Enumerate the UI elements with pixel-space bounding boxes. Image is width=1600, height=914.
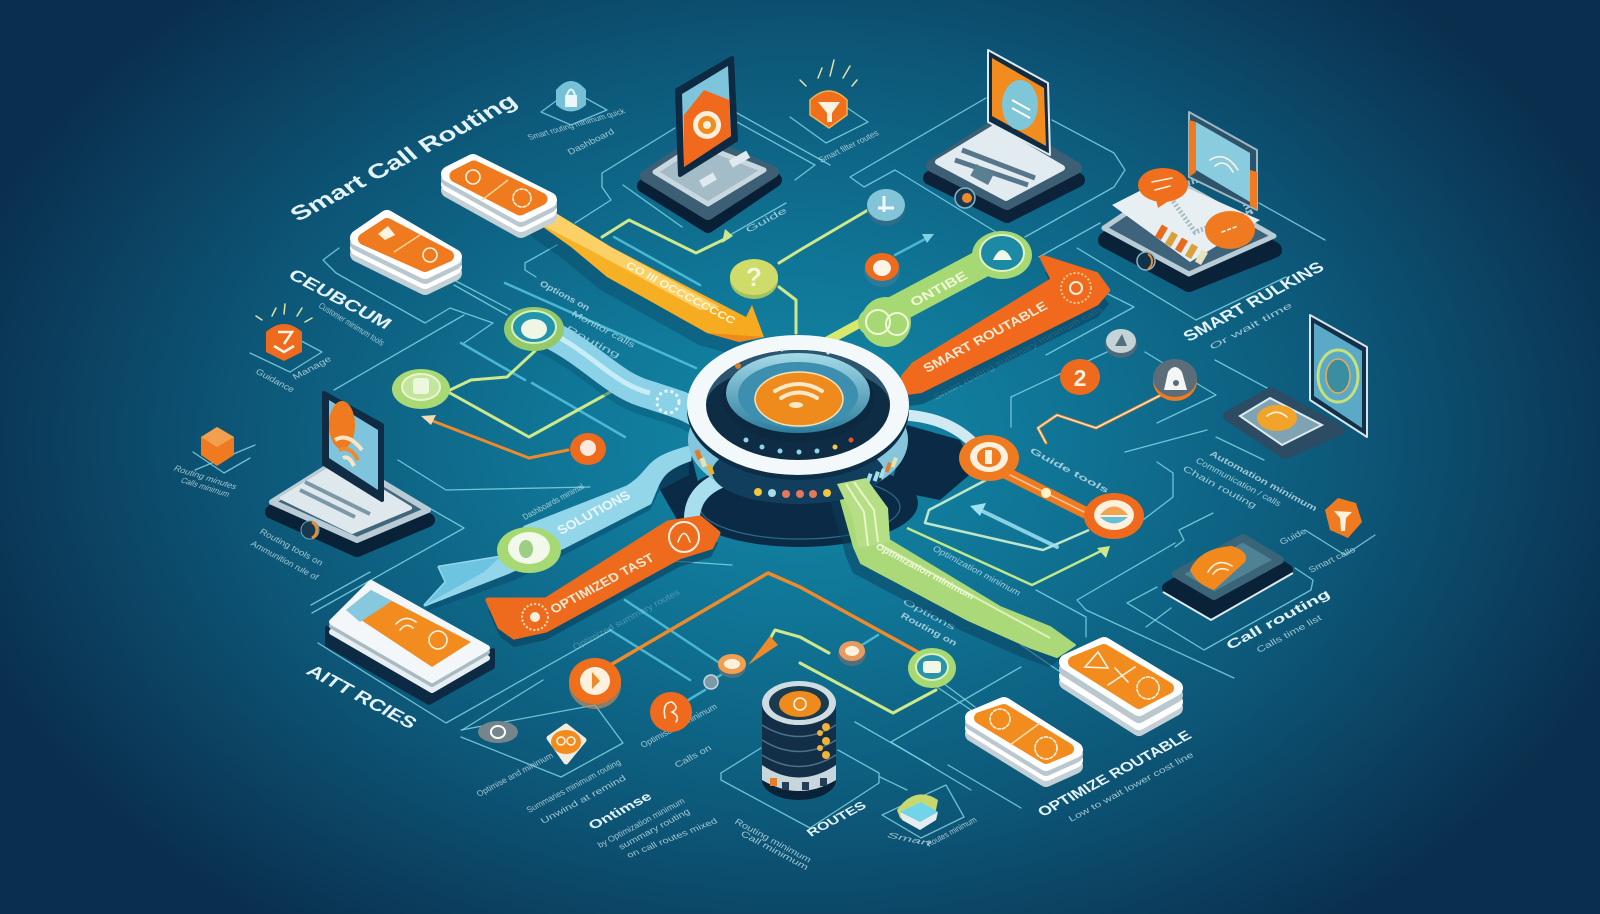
small captions: Calls time list [1255,613,1324,655]
small captions: Calls minimum [179,476,232,499]
label: Ontimse: Ontimse [586,790,655,833]
node: number two: 2 [1074,365,1086,391]
flow line: bottom routes [607,573,936,713]
small captions [172,107,1357,872]
node: question mark [730,259,778,299]
icon: orange chip [549,726,584,762]
icon: lock [541,81,607,125]
icon: orange cube left [193,427,250,473]
node: number two [1060,359,1100,395]
small captions: Dashboard [566,127,616,156]
flow line: right box routes [907,480,1110,585]
arch: left from hub [692,473,745,522]
ribbon: light blue left top [534,325,700,423]
node: orange small top [864,253,900,287]
arch: hub to right node [905,415,975,445]
ribbon: yellow arrow [528,212,764,354]
node: question mark: ? [746,262,762,292]
device: keyboard top right [1104,112,1274,284]
card: top left [449,162,549,230]
ribbon: orange top right [904,258,1109,406]
connector lines [195,98,1325,828]
ribbon: green top right [820,231,1032,347]
label: Aitt Roles: AITT RCIES [302,662,421,733]
small captions: Options on [538,279,592,313]
small captions: Optimization minimum [931,544,1023,598]
hub white ring [687,340,909,480]
ribbon: orange bottom left: OPTIMIZED TAST [547,550,657,616]
small captions: Dashboards minimal [521,482,586,522]
ribbon: green top right: ONTIBE [907,268,970,309]
card: bottom right upper [1067,645,1175,728]
label: Optimized routing: OPTIMIZE ROUTABLE [1035,728,1195,820]
small captions: Options [901,597,958,632]
label: Smart Routings: SMART RULKINS [1179,259,1328,345]
device: phone right [1228,315,1367,454]
ribbon: green bottom right [830,485,1075,667]
device: laptop top [930,50,1078,216]
flow line: right orange route [1038,395,1161,443]
bubble: orange lower [1205,211,1255,249]
node: green left top [504,307,564,351]
small captions: Guide tools [1028,446,1111,495]
card: bottom right lower [973,705,1075,779]
label: Ceubcum: CEUBCUM [284,266,395,333]
flow line: top green arrows [602,210,934,333]
small captions: Routing on [899,611,959,648]
node: small silver [704,675,718,689]
small captions: Routing [564,324,622,360]
node: green left lower [392,369,450,409]
node: orange left [570,433,606,465]
small captions: Monitor calls [570,309,637,350]
node: small right [838,641,866,666]
card: left [358,218,454,287]
flow line: left green and orange routes [421,350,614,458]
small captions: Manage [291,354,333,382]
icon: wifi [775,384,822,408]
small captions: Chain routing [1181,464,1258,510]
icon: funnel [790,60,868,143]
small captions: Routing tools on [258,527,325,567]
small captions: Or wait time [1208,301,1294,352]
small captions: on call routes mixed [625,816,719,860]
small captions: Smart routing summary minimum calls [932,304,1105,402]
hub dark dish [706,350,890,460]
small captions: Call minimum [739,829,811,872]
icon: gem [882,785,964,838]
card: stacked bottom left [327,583,493,703]
hub orange button [755,372,843,426]
small captions: Low to wait lower cost line [1067,750,1195,824]
small captions: Optimized summary routes [571,587,682,652]
small captions: Optimisation minimum [639,702,719,750]
hub shadow [654,425,975,547]
small captions: by Optimization minimum [596,796,687,850]
device: wifi tablet right [1163,538,1293,620]
small captions: Guide [1278,527,1308,546]
node: blue top [867,189,905,226]
ribbon: light blue bottom with arrow [425,447,690,612]
small captions: Routing minimum [733,817,813,865]
hub blue ring [726,353,870,433]
device: phone top [644,58,775,226]
node: small orange [718,654,746,678]
small captions: Customer minimum tools [317,301,386,348]
bubble: orange [1138,168,1188,208]
small captions: Smart [885,831,935,848]
node: green bottom left [497,527,561,573]
database cylinder [762,681,836,800]
green ribbon start at hub [837,478,890,548]
small captions: Smart filter routes [817,128,881,164]
small captions: Smart calls [1307,545,1357,574]
ribbon: light blue bottom with arrow: SOLUTIONS [554,488,633,537]
ribbon: yellow arrow: CO III OCCCCCCCC [623,260,737,327]
small captions: Guide [744,206,789,235]
node: orange bottom second [650,692,692,732]
small captions: Automation minimum [1208,449,1319,513]
small captions: Smart routing minimum quick [526,107,627,142]
ribbon: green bottom right: Optimization minimum [874,542,976,601]
label: Routes: ROUTES [804,799,869,839]
node: orange bottom [569,658,621,709]
node: lock [1153,359,1197,401]
small captions: Routes minimum [925,815,979,849]
node: silver [1105,329,1137,358]
small captions: Calls on [673,743,713,770]
hub leds [694,348,898,498]
icon: orange pin right [1305,498,1375,555]
small captions: Communication / calls [1194,456,1283,508]
small captions: Summaries minimum routing [525,758,622,815]
small captions: Optimise and minimum [475,751,555,799]
small captions: Unwind at remind [539,773,628,826]
ribbon: orange bottom left [488,518,718,647]
icon: orange badge left [250,304,322,372]
hub body [688,378,908,502]
small captions: Guidance [254,367,296,394]
node: orange pair right [959,435,1144,539]
label: Smart Call Routing: Smart Call Routing [285,90,523,226]
device: phone left [272,393,428,550]
ribbon: orange top right: SMART ROUTABLE [920,298,1050,375]
small captions: Call routing [1223,586,1333,652]
node: green bottom right [908,648,956,688]
hub [687,335,909,504]
icon: grey chip [478,721,518,743]
small captions: Routing minutes [172,464,239,491]
small captions: Ammunition rule of [249,539,321,582]
small captions: summary routing [617,807,692,852]
